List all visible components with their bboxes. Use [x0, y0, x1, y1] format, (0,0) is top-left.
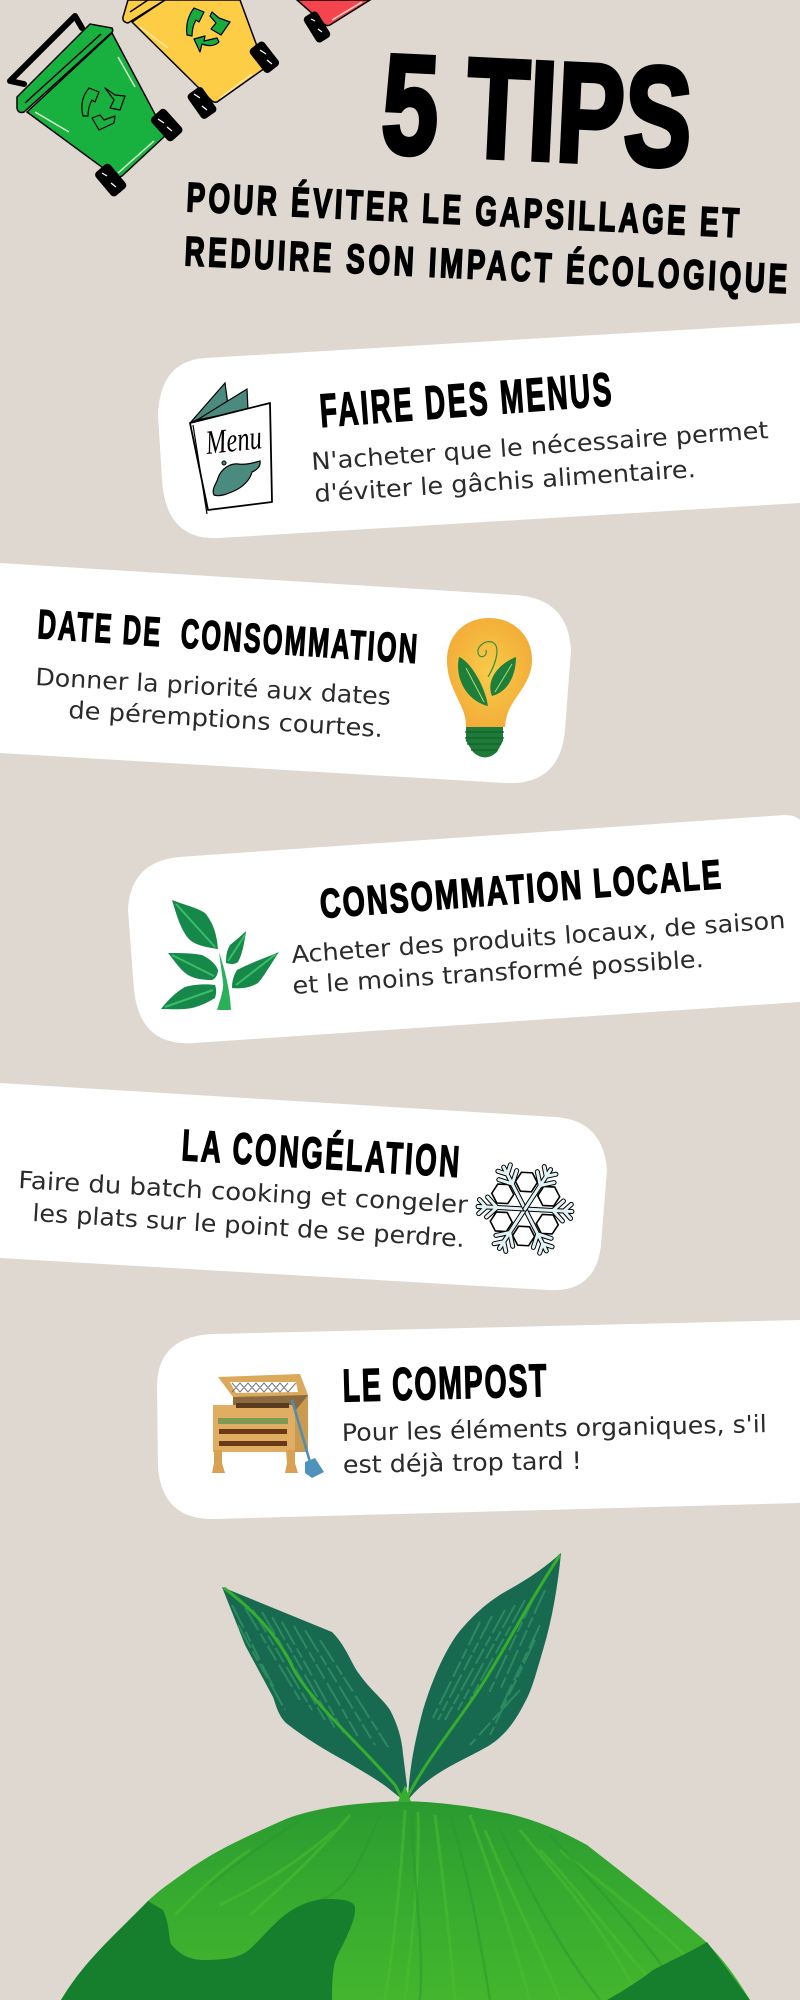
text: Acheter des produits locaux, de saison: [290, 906, 786, 969]
heading: LA CONGÉLATION: [180, 1121, 461, 1187]
text: [35, 663, 392, 743]
heading: FAIRE DES MENUS: [318, 364, 613, 438]
panel: la congelation: [0, 1083, 607, 1290]
subtitle: REDUIRE SON IMPACT ÉCOLOGIQUE: [184, 228, 788, 302]
text: de péremptions courtes.: [68, 696, 384, 743]
heading: CONSOMMATION LOCALE: [318, 852, 722, 927]
icon: light bulb: [447, 618, 532, 758]
text: [290, 906, 786, 1000]
icon: plant: [161, 900, 279, 1010]
heading: LE COMPOST: [342, 1355, 547, 1412]
subtitle: [184, 174, 788, 302]
panel: date de consommation: [0, 563, 571, 783]
text: Faire du batch cooking et congeler: [18, 1166, 469, 1219]
continent: right: [607, 1942, 750, 2000]
left leaf: [222, 1587, 407, 1802]
icon: recycling bins: [10, 0, 370, 198]
text: et le moins transformé possible.: [292, 945, 705, 1000]
icon: red bin: [297, 0, 370, 44]
right leaf: [405, 1553, 561, 1802]
text: [342, 1410, 767, 1479]
text: [310, 416, 769, 508]
subtitle: POUR ÉVITER LE GAPSILLAGE ET: [186, 174, 740, 246]
panel: consommation locale: [128, 815, 800, 1043]
continent: left: [61, 1899, 355, 2000]
text: Pour les éléments organiques, s'il: [342, 1410, 767, 1447]
panel: le compost: [157, 1320, 800, 1519]
stem: [398, 1785, 411, 1802]
icon: menu: [190, 383, 272, 514]
text: est déjà trop tard !: [343, 1447, 582, 1479]
heading: DATE DE CONSOMMATION: [36, 602, 419, 673]
icon: compost bin: [212, 1374, 324, 1478]
icon: green bin: [10, 16, 184, 198]
illustration: globe: [61, 1785, 750, 2000]
panel: faire des menus: [158, 323, 800, 538]
text: les plats sur le point de se perdre.: [32, 1199, 466, 1253]
illustration: sprout: [222, 1553, 561, 1802]
icon: snowflake: [476, 1161, 574, 1257]
icon: yellow bin: [123, 0, 281, 120]
text: d'éviter le gâchis alimentaire.: [314, 455, 697, 508]
icon: menu: Menu: [203, 419, 264, 462]
text: N'acheter que le nécessaire permet: [310, 416, 769, 476]
text: Donner la priorité aux dates: [35, 663, 392, 711]
text: [18, 1166, 469, 1253]
